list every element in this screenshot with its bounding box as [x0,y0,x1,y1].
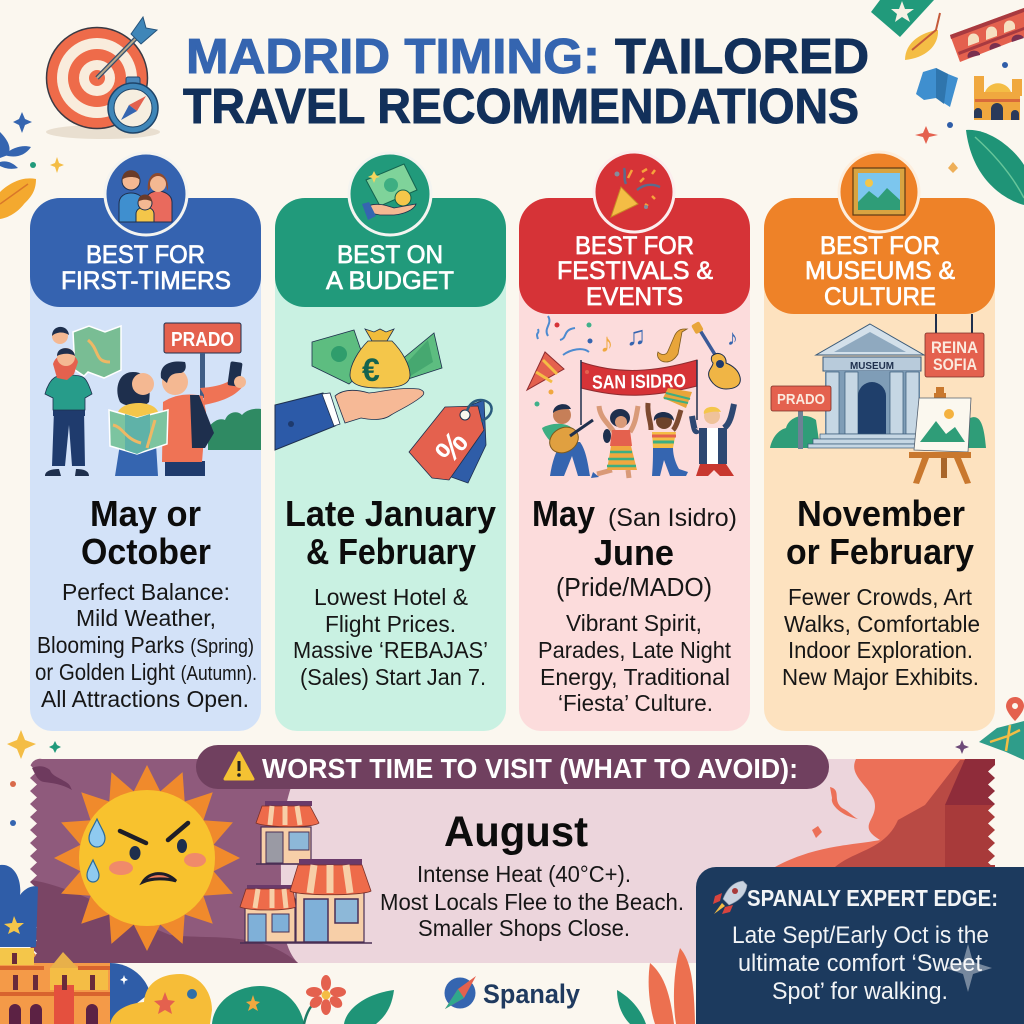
text: budget description: Massive ‘REBAJAS’ [293,637,488,663]
panel: best for first-timers [30,153,261,731]
decoration: mid-page sparkles and map pin [7,697,1024,826]
callout: Spanaly expert edge: SPANALY EXPERT EDGE: [747,885,998,911]
text: expert recommendation: ultimate comfort ‘Sweet [738,950,982,977]
text: budget description [293,584,488,690]
heading: November or February: November [797,493,965,534]
text: festivals description: Energy, Traditional [540,664,730,690]
panel: best for festivals and events [519,152,750,731]
illustration: San Isidro festival crowd: ♪ [600,328,614,358]
header: best for first-timers: BEST FOR [86,241,205,269]
icon: angry sweating sun [54,765,240,951]
text: expert recommendation: Spot’ for walking. [772,978,948,1005]
header: best for first-timers: FIRST-TIMERS [61,267,231,295]
icon: hand with money [349,153,431,235]
heading: August: August [444,808,588,856]
title [183,30,869,134]
header: best for museums and culture [764,198,995,314]
illustration: family with map and Prado sign [45,323,261,476]
text: first-timers description: or Golden Light (Autumn). [35,659,257,685]
panel: best on a budget [275,153,506,731]
text: museums description: New Major Exhibits. [782,664,979,690]
text: museums description [782,584,980,690]
icon: target with arrow and compass [46,17,160,139]
heading: May and June with events [532,493,737,602]
heading: Late January & February: Late January [285,493,497,534]
heading: Late January & February [285,493,497,572]
title: TAILORED [615,30,869,84]
icon: rocket [713,881,747,914]
text: museums description: Fewer Crowds, Art [788,584,972,610]
icon: party popper [594,152,674,232]
panel: best for museums and culture [764,152,995,731]
text: budget description: (Sales) Start Jan 7. [300,664,486,690]
decoration: left leaves and sparkles [0,112,64,219]
header: best on a budget: A BUDGET [326,267,454,295]
text: budget description: Flight Prices. [325,611,456,637]
heading: May or October: October [81,531,211,572]
illustration: museum, signs and easel [770,314,986,484]
header: best for museums and culture: MUSEUMS & [805,257,955,285]
text: expert recommendation: Late Sept/Early Oct is the [732,922,989,949]
heading: Late January & February: & February [306,531,477,572]
header: best for first-timers [30,198,261,307]
header: best for museums and culture: CULTURE [824,283,936,311]
logo: Spanaly: Spanaly [483,979,580,1009]
icon: family [105,153,187,235]
illustration: San Isidro festival crowd: SAN ISIDRO [592,371,686,394]
header: best for festivals and events: BEST FOR [575,232,694,260]
banner: worst time to visit [196,745,829,789]
text: festivals description: Parades, Late Night [538,637,731,663]
heading: November or February: or February [786,531,975,572]
illustration: family with map and Prado sign: PRADO [171,329,234,351]
text: August description: Most Locals Flee to the Beach. [380,889,684,915]
illustration: museum, signs and easel: SOFIA [933,356,977,374]
text: August description [380,861,684,941]
icon: framed picture [839,152,919,232]
title: TRAVEL RECOMMENDATIONS [183,80,859,134]
text: first-timers description: Blooming Parks (Spring) [37,632,254,658]
heading: May and June with events: (San Isidro) [608,504,737,532]
illustration: museum, signs and easel: MUSEUM [850,360,894,372]
header: best on a budget [275,198,506,307]
text: museums description: Indoor Exploration. [788,637,973,663]
illustration: hand receiving money bag and discount tag: € [362,352,380,388]
title: MADRID TIMING: [186,30,600,84]
illustration: San Isidro festival crowd [527,316,740,478]
text: August description: Smaller Shops Close. [418,915,630,941]
heading: May and June with events: (Pride/MADO) [556,572,712,602]
banner: worst time to visit: WORST TIME TO VISIT (WHAT TO AVOID): [262,753,798,784]
heading: May and June with events: June [594,532,674,573]
illustration: lava-red rocks on the right [775,759,995,867]
text: expert recommendation [732,922,989,1005]
heading: May and June with events: May [532,493,596,534]
illustration: museum, signs and easel: REINA [931,339,978,357]
text: first-timers description: Mild Weather, [76,605,216,631]
heading: May or October: May or [90,493,201,534]
text: budget description: Lowest Hotel & [314,584,468,610]
illustration: San Isidro festival crowd: ♫ [626,321,646,351]
text: museums description: Walks, Comfortable [784,611,980,637]
heading: May or October [81,493,211,572]
text: festivals description: Vibrant Spirit, [566,610,702,636]
callout: Spanaly expert edge [696,867,1024,1024]
text: festivals description [538,610,731,716]
text: first-timers description: All Attractions Open. [41,686,249,712]
panel: worst time to visit [30,745,995,963]
text: festivals description: ‘Fiesta’ Culture. [558,690,713,716]
heading: November or February [786,493,975,572]
logo: Spanaly [444,976,580,1009]
header: best for festivals and events: EVENTS [586,283,683,311]
header: best on a budget: BEST ON [337,241,443,269]
illustration: closed shops [240,801,372,943]
decoration: bottom-left Madrid skyline and foliage [0,865,695,1024]
header: best for festivals and events [519,198,750,314]
text: August description: Intense Heat (40°C+). [417,861,631,887]
decoration: top right travel stickers [871,0,1024,205]
text: first-timers description: Perfect Balance: [62,579,230,605]
illustration: hand receiving money bag and discount tag [275,329,492,483]
icon: warning triangle [225,753,253,779]
header: best for museums and culture: BEST FOR [820,232,940,260]
illustration: hand receiving money bag and discount tag: % [428,424,475,470]
header: best for festivals and events: FESTIVALS & [557,257,713,285]
illustration: museum, signs and easel: PRADO [777,391,825,408]
text: first-timers description [35,579,257,712]
illustration: San Isidro festival crowd: ♪ [727,325,738,350]
